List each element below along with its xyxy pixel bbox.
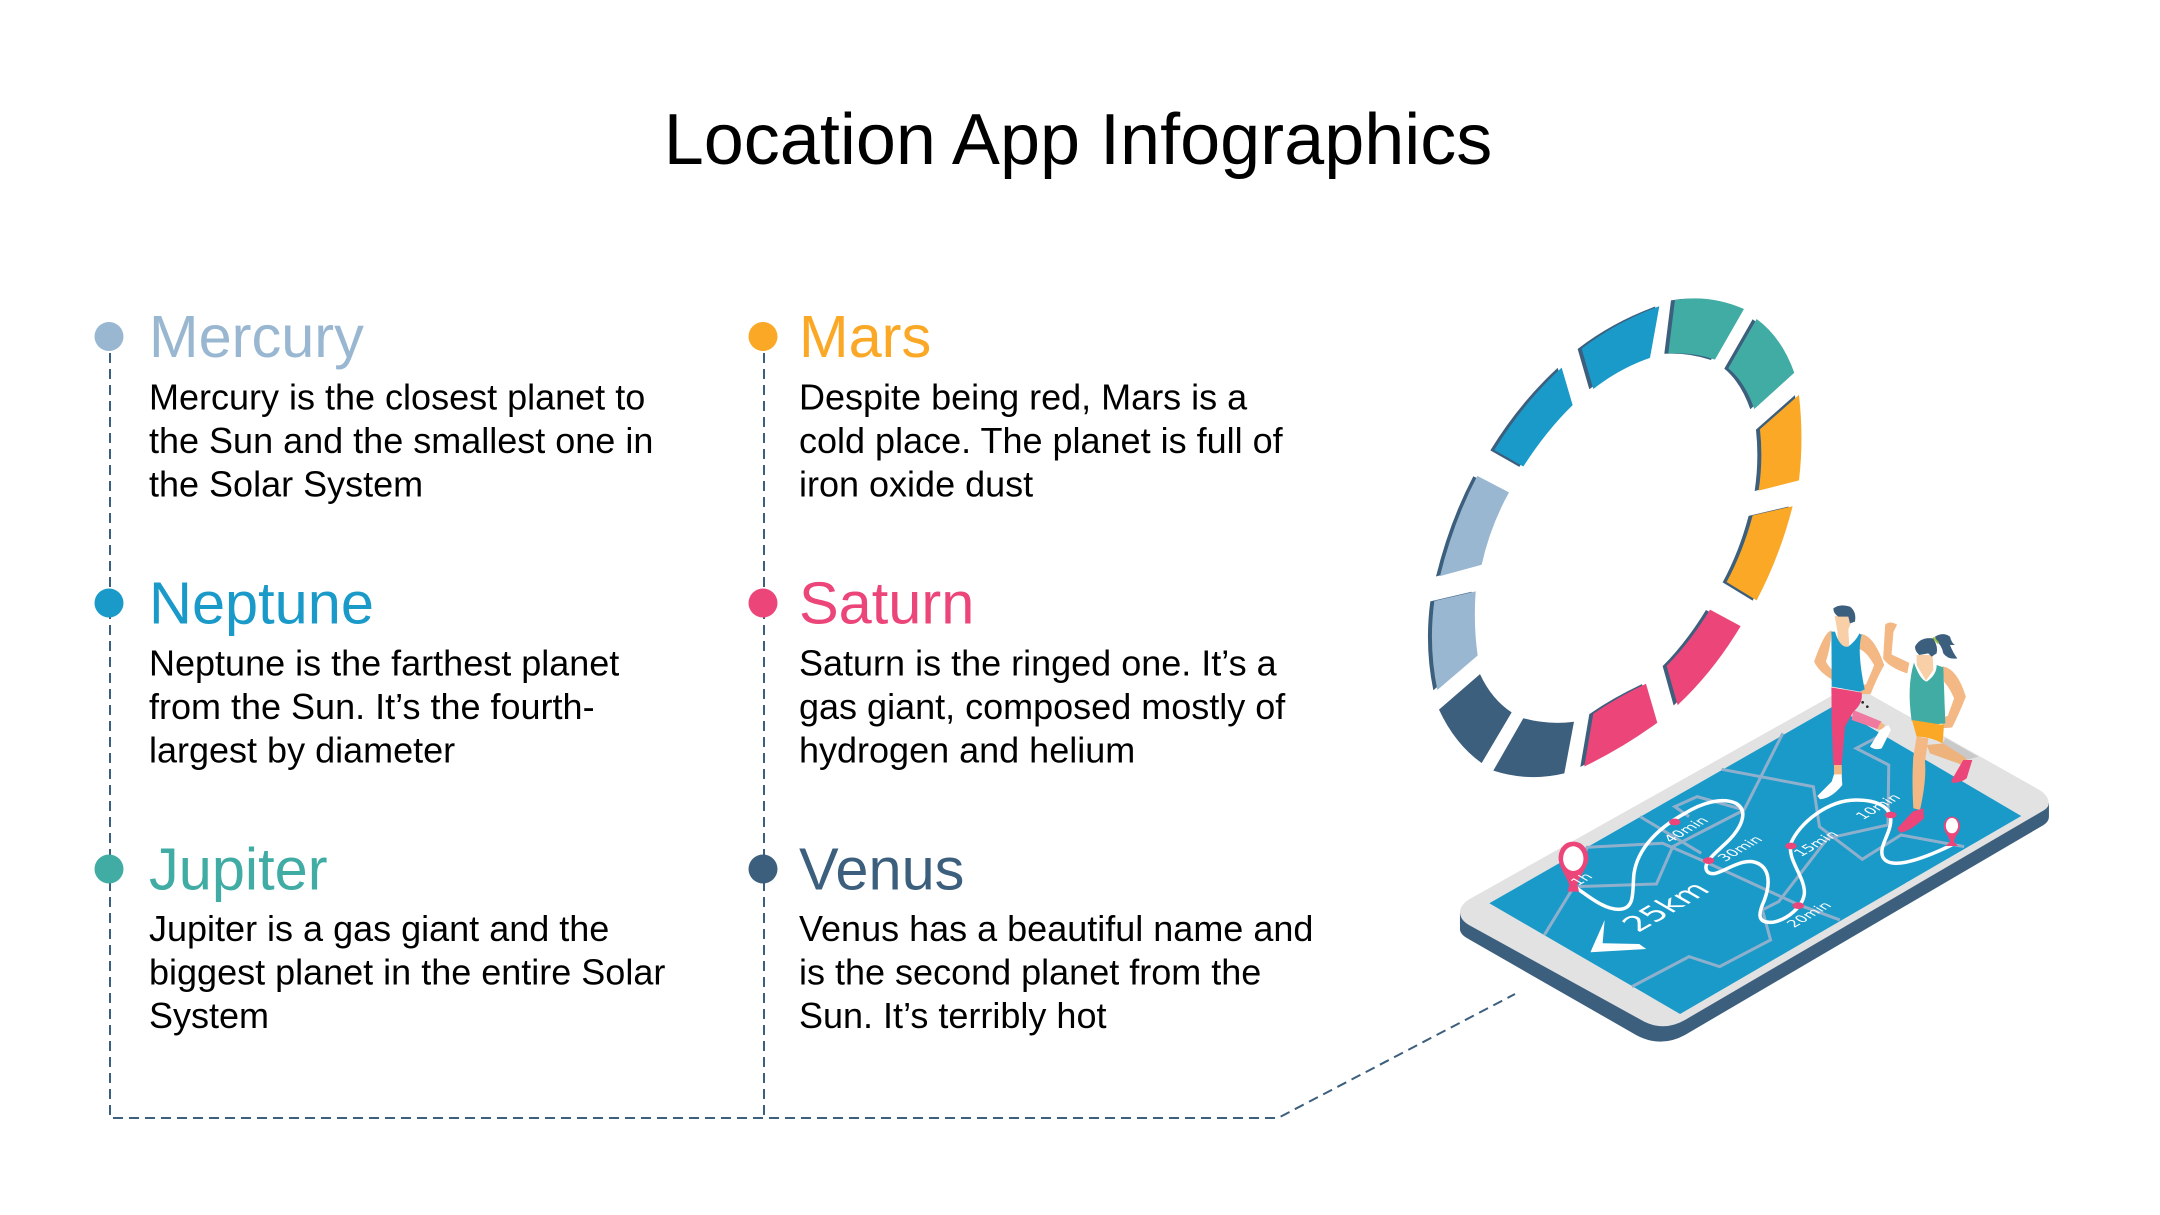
item: Mars: cold place. The planet is full of bbox=[799, 420, 1284, 461]
phone with map: 10min bbox=[1853, 792, 1905, 822]
item: Jupiter bbox=[94, 836, 665, 1036]
item: Jupiter: Jupiter is a gas giant and the bbox=[149, 908, 609, 949]
item: Venus: is the second planet from the bbox=[799, 952, 1261, 992]
item: Jupiter: biggest planet in the entire Solar bbox=[149, 952, 665, 992]
item: Saturn: gas giant, composed mostly of bbox=[799, 686, 1286, 727]
item: Mercury: Mercury is the closest planet to bbox=[149, 376, 645, 418]
item: Neptune: Neptune is the farthest planet bbox=[149, 642, 619, 684]
segmented ring bbox=[1428, 298, 1801, 777]
item: Saturn: Saturn is the ringed one. It’s a bbox=[799, 642, 1278, 684]
item: Jupiter: Jupiter bbox=[149, 836, 328, 902]
phone with map: 25km bbox=[1615, 877, 1718, 937]
phone with map: 20min bbox=[1784, 900, 1836, 930]
phone with map: 15min bbox=[1791, 829, 1843, 859]
runner: man bbox=[1815, 605, 1891, 799]
item: Venus: Venus bbox=[799, 836, 964, 902]
item: Jupiter: System bbox=[149, 995, 269, 1036]
item: Venus bbox=[748, 836, 1313, 1036]
item: Mercury: Mercury bbox=[149, 303, 364, 370]
item: Mars: iron oxide dust bbox=[799, 464, 1033, 504]
item: Mars: Mars bbox=[799, 303, 931, 370]
item: Mercury: the Solar System bbox=[149, 464, 423, 504]
item: Neptune: Neptune bbox=[149, 570, 374, 636]
item: Neptune bbox=[94, 570, 619, 770]
phone with map: 40min bbox=[1661, 815, 1713, 845]
item: Neptune: from the Sun. It’s the fourth- bbox=[149, 686, 595, 727]
item: Venus: Venus has a beautiful name and bbox=[799, 908, 1313, 949]
item: Venus: Sun. It’s terribly hot bbox=[799, 995, 1106, 1036]
runner: woman bbox=[1884, 623, 1972, 833]
title: Location App Infographics bbox=[664, 100, 1492, 180]
item: Neptune: largest by diameter bbox=[149, 730, 455, 770]
phone with map: 1h bbox=[1568, 871, 1597, 888]
phone with map: 30min bbox=[1715, 834, 1767, 864]
item: Mars: Despite being red, Mars is a bbox=[799, 376, 1248, 418]
item: Mercury bbox=[94, 303, 653, 504]
item: Saturn: hydrogen and helium bbox=[799, 730, 1135, 770]
item: Saturn: Saturn bbox=[799, 570, 974, 636]
item: Mars bbox=[748, 303, 1284, 504]
phone with map bbox=[1460, 685, 2049, 1042]
item: Mercury: the Sun and the smallest one in bbox=[149, 420, 653, 461]
item: Saturn bbox=[748, 570, 1286, 770]
dashed connector lines bbox=[110, 337, 1515, 1118]
runners bbox=[1815, 605, 1972, 833]
